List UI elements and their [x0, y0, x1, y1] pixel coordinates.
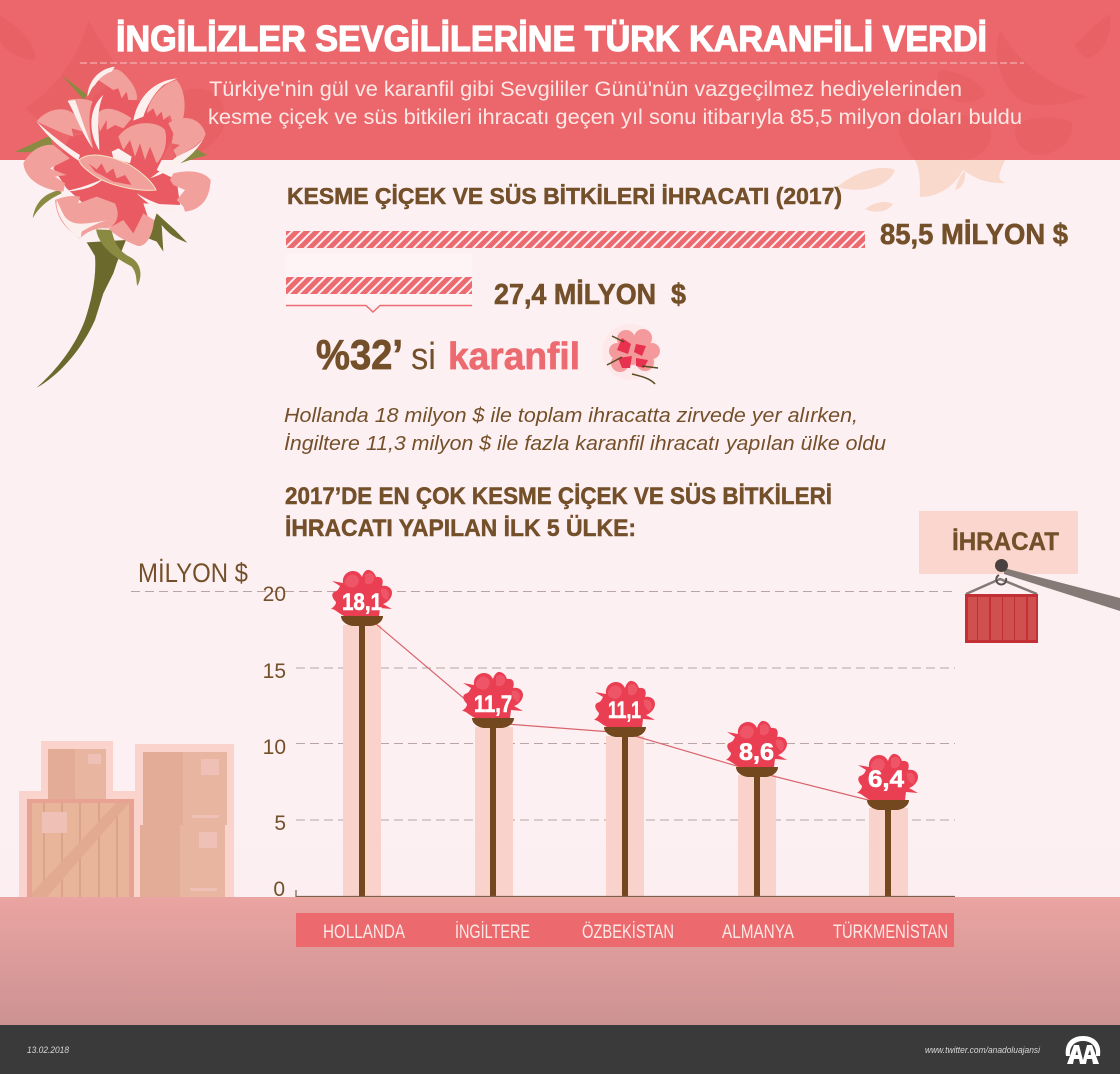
y axis labels: 20	[263, 583, 286, 606]
unit label: MİLYON $	[138, 557, 248, 588]
stems	[359, 622, 891, 896]
country labels: ALMANYA	[722, 922, 794, 943]
export box	[919, 511, 1078, 574]
total export value: 85,5 MİLYON $	[880, 219, 1068, 251]
country band	[296, 913, 954, 947]
country labels: ÖZBEKİSTAN	[582, 922, 674, 943]
subtitle: Türkiye'nin gül ve karanfil gibi Sevgililer Günü'nün vazgeçilmez hediyelerinden	[209, 78, 962, 101]
bar: Özbekistan 11,1: 11,1	[608, 697, 641, 724]
chart heading: 2017’DE EN ÇOK KESME ÇİÇEK VE SÜS BİTKİLERİ	[285, 483, 832, 510]
ground	[0, 897, 1120, 1025]
header leaf silhouettes	[0, 14, 1110, 160]
carnation export value: 27,4 MİLYON $	[494, 279, 686, 311]
icon: carnation flower	[15, 67, 211, 388]
chart heading	[285, 483, 832, 542]
chart heading: İHRACATI YAPILAN İLK 5 ÜLKE:	[285, 515, 636, 542]
icon: stacked crates	[19, 741, 234, 897]
bar: İngiltere 11,7	[462, 672, 523, 728]
bar: Hollanda 18,1	[331, 570, 392, 626]
bar: Türkmenistan 6,4: 6,4	[868, 766, 905, 793]
export label: İHRACAT	[952, 528, 1059, 556]
total export bar	[286, 231, 865, 248]
section heading: cut flower exports: KESME ÇİÇEK VE SÜS BİTKİLERİ İHRACATI (2017)	[287, 183, 842, 209]
subtitle: kesme çiçek ve süs bitkileri ihracatı geçen yıl sonu itibarıyla 85,5 milyon doları buldu	[208, 106, 1022, 129]
bar: Almanya 8,6: 8,6	[739, 739, 774, 766]
carnation share: %32’	[316, 331, 403, 378]
y axis labels: 0	[273, 878, 285, 901]
country labels: TÜRKMENİSTAN	[833, 922, 948, 943]
subtitle	[208, 78, 1022, 129]
bar: Hollanda 18,1: 18,1	[342, 589, 382, 616]
note text: Hollanda 18 milyon $ ile toplam ihracatta zirvede yer alırken,	[284, 405, 858, 427]
y axis labels: 15	[263, 660, 286, 683]
country labels	[323, 922, 948, 943]
footer bar	[0, 1025, 1120, 1074]
title divider	[80, 62, 1024, 64]
carnation share: karanfil	[448, 336, 580, 378]
footer social link: www.twitter.com/anadoluajansi	[925, 1045, 1041, 1055]
country labels: İNGİLTERE	[455, 922, 530, 943]
carnation share	[316, 331, 580, 378]
carnation share: si	[411, 336, 436, 378]
carnation export bar with callout	[286, 254, 472, 312]
bar: Özbekistan 11,1	[594, 681, 655, 737]
icon: small carnation	[602, 324, 660, 384]
header band	[0, 0, 1120, 160]
icon: agency logo	[1066, 1036, 1100, 1064]
gridlines	[131, 592, 955, 820]
icon: crane and container	[965, 559, 1120, 643]
trend line	[362, 612, 888, 805]
y axis labels: 10	[263, 736, 286, 759]
bar: Almanya 8,6	[726, 721, 787, 777]
title: İNGİLİZLER SEVGİLİLERİNE TÜRK KARANFİLİ VERDİ	[116, 18, 987, 59]
pale bars	[343, 625, 908, 896]
bar: Türkmenistan 6,4	[857, 754, 918, 810]
y axis labels	[263, 583, 286, 901]
footer date: 13.02.2018	[27, 1045, 69, 1055]
country labels: HOLLANDA	[323, 922, 405, 943]
axis baseline	[296, 890, 955, 896]
note text	[284, 405, 886, 455]
y axis labels: 5	[274, 812, 286, 835]
chart	[131, 557, 955, 901]
bar: İngiltere 11,7: 11,7	[474, 691, 512, 718]
decorative peach leaves below header	[837, 160, 1006, 212]
note text: İngiltere 11,3 milyon $ ile fazla karanfil ihracatı yapılan ülke oldu	[284, 433, 886, 455]
